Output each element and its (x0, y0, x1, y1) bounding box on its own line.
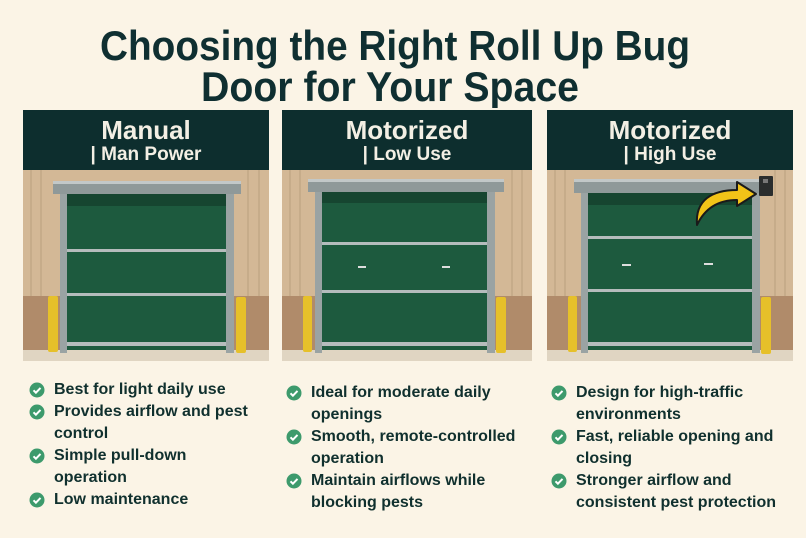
arrow (697, 182, 756, 225)
illustration: low use door (282, 170, 532, 361)
illustration: high use door (547, 170, 793, 361)
list: high use: consistent pest protection (576, 494, 776, 511)
list: manual: operation (54, 469, 127, 486)
list: manual: Low maintenance (54, 491, 188, 508)
list: low use: operation (311, 450, 384, 467)
list: low use: openings (311, 406, 382, 423)
list: manual: control (54, 425, 108, 442)
list: high use: environments (576, 406, 681, 423)
list: manual: Provides airflow and pest (54, 403, 248, 420)
header: motorized low use: Motorized (346, 115, 468, 145)
list: high use: closing (576, 450, 632, 467)
header: motorized low use: | Low Use (363, 144, 451, 165)
list: low use: Maintain airflows while (311, 472, 485, 489)
title (100, 22, 690, 108)
list: high use: Stronger airflow and (576, 472, 732, 489)
list: manual: Best for light daily use (54, 381, 226, 398)
title: Choosing the Right Roll Up Bug (100, 22, 690, 69)
list: high use: Design for high-traffic (576, 384, 743, 401)
header: motorized low use (282, 110, 532, 170)
icon: control box (759, 176, 773, 196)
panel: motorized low use (282, 110, 532, 361)
panel: motorized high use (547, 110, 793, 361)
list: high use: Fast, reliable opening and (576, 428, 773, 445)
list: high use (552, 384, 776, 511)
list: manual (30, 381, 248, 508)
list: low use: Ideal for moderate daily (311, 384, 491, 401)
list: low use (286, 384, 515, 511)
illustration: manual door (23, 170, 269, 361)
list: manual: Simple pull-down (54, 447, 186, 464)
list: low use: Smooth, remote-controlled (311, 428, 515, 445)
panel: manual (23, 110, 269, 361)
header: motorized high use: Motorized (609, 115, 731, 145)
header: manual: Manual (101, 115, 191, 145)
header: motorized high use: | High Use (624, 144, 716, 165)
header: motorized high use (547, 110, 793, 170)
header: manual (23, 110, 269, 170)
list: low use: blocking pests (311, 494, 423, 511)
header: manual: | Man Power (91, 144, 201, 165)
